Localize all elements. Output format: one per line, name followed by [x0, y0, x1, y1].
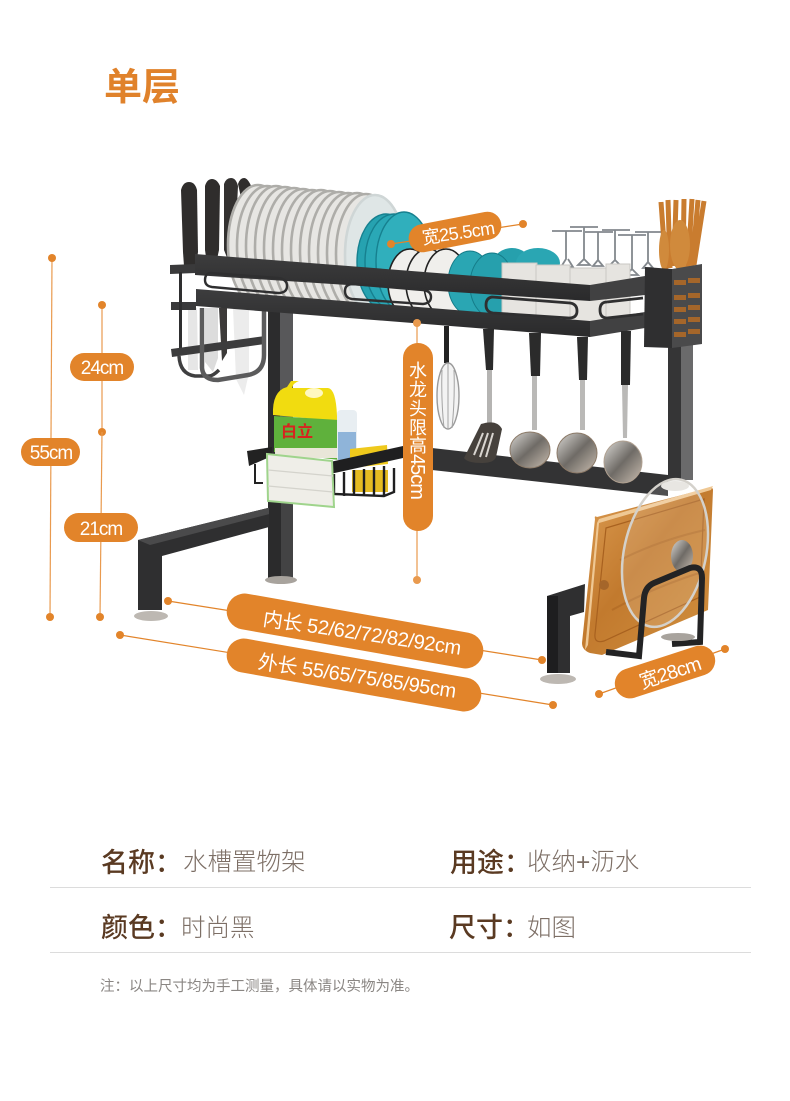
dimension: faucet height clearance 45cm: 限 [409, 418, 427, 438]
dimension: outer length: 外长 55/65/75/85/95cm [256, 650, 458, 703]
spec: use value: 收纳+沥水 [527, 849, 639, 876]
spec: colour label: 颜色： [101, 913, 182, 943]
spec: use label: 用途： [450, 848, 531, 878]
title: 单层 [104, 67, 180, 109]
footnote: 注：以上尺寸均为手工测量，具体请以实物为准。 [100, 979, 419, 995]
hanging utensils [437, 326, 642, 483]
cups [502, 263, 630, 328]
dimension: depth 28cm [595, 642, 729, 702]
knife holder [170, 264, 265, 380]
pot lid [609, 471, 721, 635]
rack: rear lower bar [432, 448, 668, 496]
dimension: height 21cm [64, 432, 138, 621]
dish cloth [267, 454, 334, 507]
teal plates [357, 212, 432, 312]
rack: right post [668, 345, 693, 480]
spec: name label: 名称： [101, 848, 182, 878]
spec: size value: 如图 [527, 915, 576, 942]
rack: right leg [540, 584, 695, 684]
spec: colour value: 时尚黑 [181, 915, 254, 942]
spec: name value: 水槽置物架 [183, 849, 306, 876]
detergent bottle [273, 381, 339, 460]
wine glasses [552, 227, 661, 275]
dimension: faucet height clearance 45cm: 高 [409, 436, 427, 456]
dimension: width 25.5cm [387, 209, 527, 255]
plates [228, 185, 405, 315]
dimension: inner length: 内长 52/62/72/82/92cm [261, 607, 463, 660]
dimension: width 25.5cm: 宽25.5cm [421, 218, 496, 248]
cutting board [582, 486, 713, 655]
dimension: outer length [116, 631, 557, 714]
dimension: height 21cm: 21cm [80, 519, 122, 540]
dimension: faucet height clearance 45cm: 龙 [409, 380, 427, 400]
rack: rear left post [268, 305, 293, 580]
detergent bottle: 白立 [281, 422, 313, 441]
dimension: faucet height clearance 45cm: 45cm [406, 454, 428, 499]
dimension: faucet height clearance 45cm: 水 [409, 361, 427, 381]
rack: left leg and feet [134, 500, 297, 621]
basket and sponge [247, 410, 403, 496]
dimension: height 55cm: 55cm [30, 443, 72, 464]
lid stand [606, 567, 702, 656]
dimension: height 24cm [70, 301, 134, 436]
bowls [388, 248, 560, 317]
rack: dish tray [195, 254, 645, 337]
dimension: faucet height clearance 45cm [403, 319, 433, 584]
knives [181, 178, 252, 395]
dimension: faucet height clearance 45cm: 头 [409, 399, 427, 419]
chopstick holder with utensils [644, 199, 704, 348]
spec: size label: 尺寸： [449, 913, 530, 943]
dimension: height 55cm [21, 254, 80, 621]
dimension: inner length [164, 591, 546, 671]
dimension: height 24cm: 24cm [81, 358, 123, 379]
dimension: depth 28cm: 宽28cm [637, 653, 704, 694]
